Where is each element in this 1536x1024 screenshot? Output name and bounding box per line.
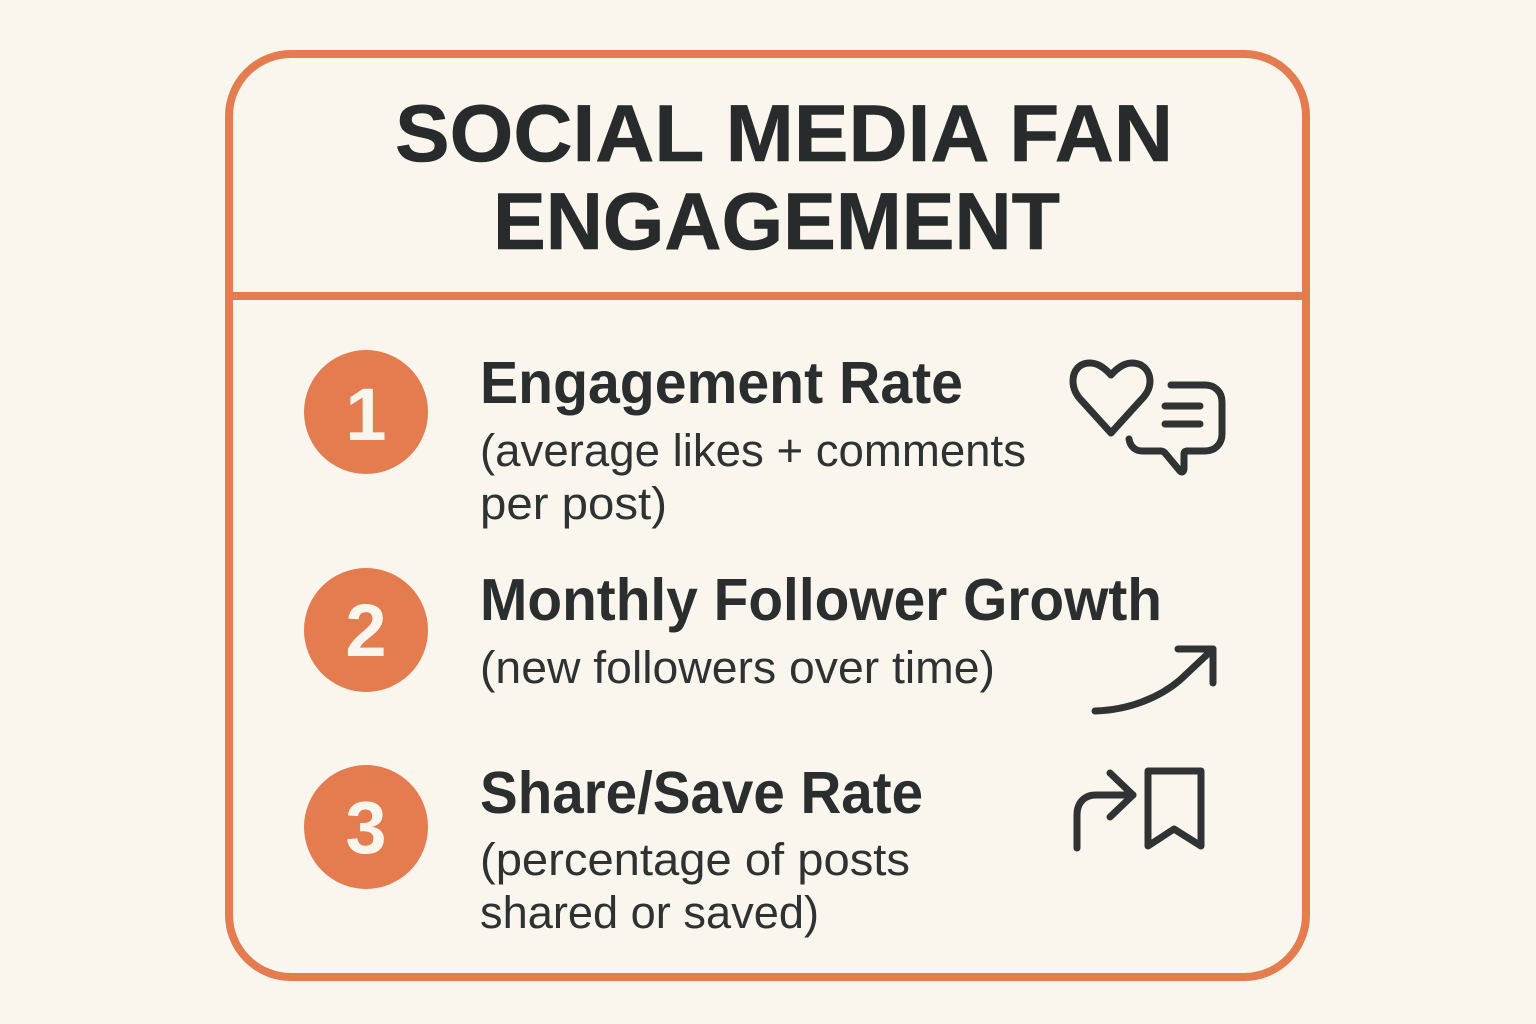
description: engagement rate: per post): [480, 478, 667, 529]
description: engagement rate: [480, 425, 1026, 529]
heading: monthly follower growth: Monthly Follower Growth: [480, 567, 1162, 633]
heading: engagement rate: Engagement Rate: [480, 350, 963, 416]
number badge 2: 2: [345, 589, 387, 672]
title: [395, 89, 1173, 267]
item 1: engagement rate: [304, 350, 1222, 529]
panel: main card: [229, 54, 1306, 977]
icon: heart and speech bubble: [1073, 363, 1222, 472]
icon: share arrow and bookmark: [1077, 771, 1201, 848]
number badge 1: 1: [345, 373, 387, 456]
title: SOCIAL MEDIA FAN: [395, 89, 1173, 179]
description: monthly follower growth: (new followers over time): [480, 642, 995, 693]
icon: rising arrow: [1095, 649, 1213, 711]
title: ENGAGEMENT: [493, 177, 1060, 267]
number badge 3: [304, 765, 428, 889]
description: share/save rate: (percentage of posts: [480, 834, 910, 885]
item 2: monthly follower growth: [304, 567, 1213, 711]
number badge 2: [304, 568, 428, 692]
description: share/save rate: shared or saved): [480, 887, 819, 938]
number badge 1: [304, 350, 428, 474]
description: engagement rate: (average likes + comments: [480, 425, 1026, 476]
item 3: share/save rate: [304, 760, 1201, 938]
heading: share/save rate: Share/Save Rate: [480, 760, 923, 826]
description: share/save rate: [480, 834, 910, 938]
number badge 3: 3: [345, 786, 387, 869]
